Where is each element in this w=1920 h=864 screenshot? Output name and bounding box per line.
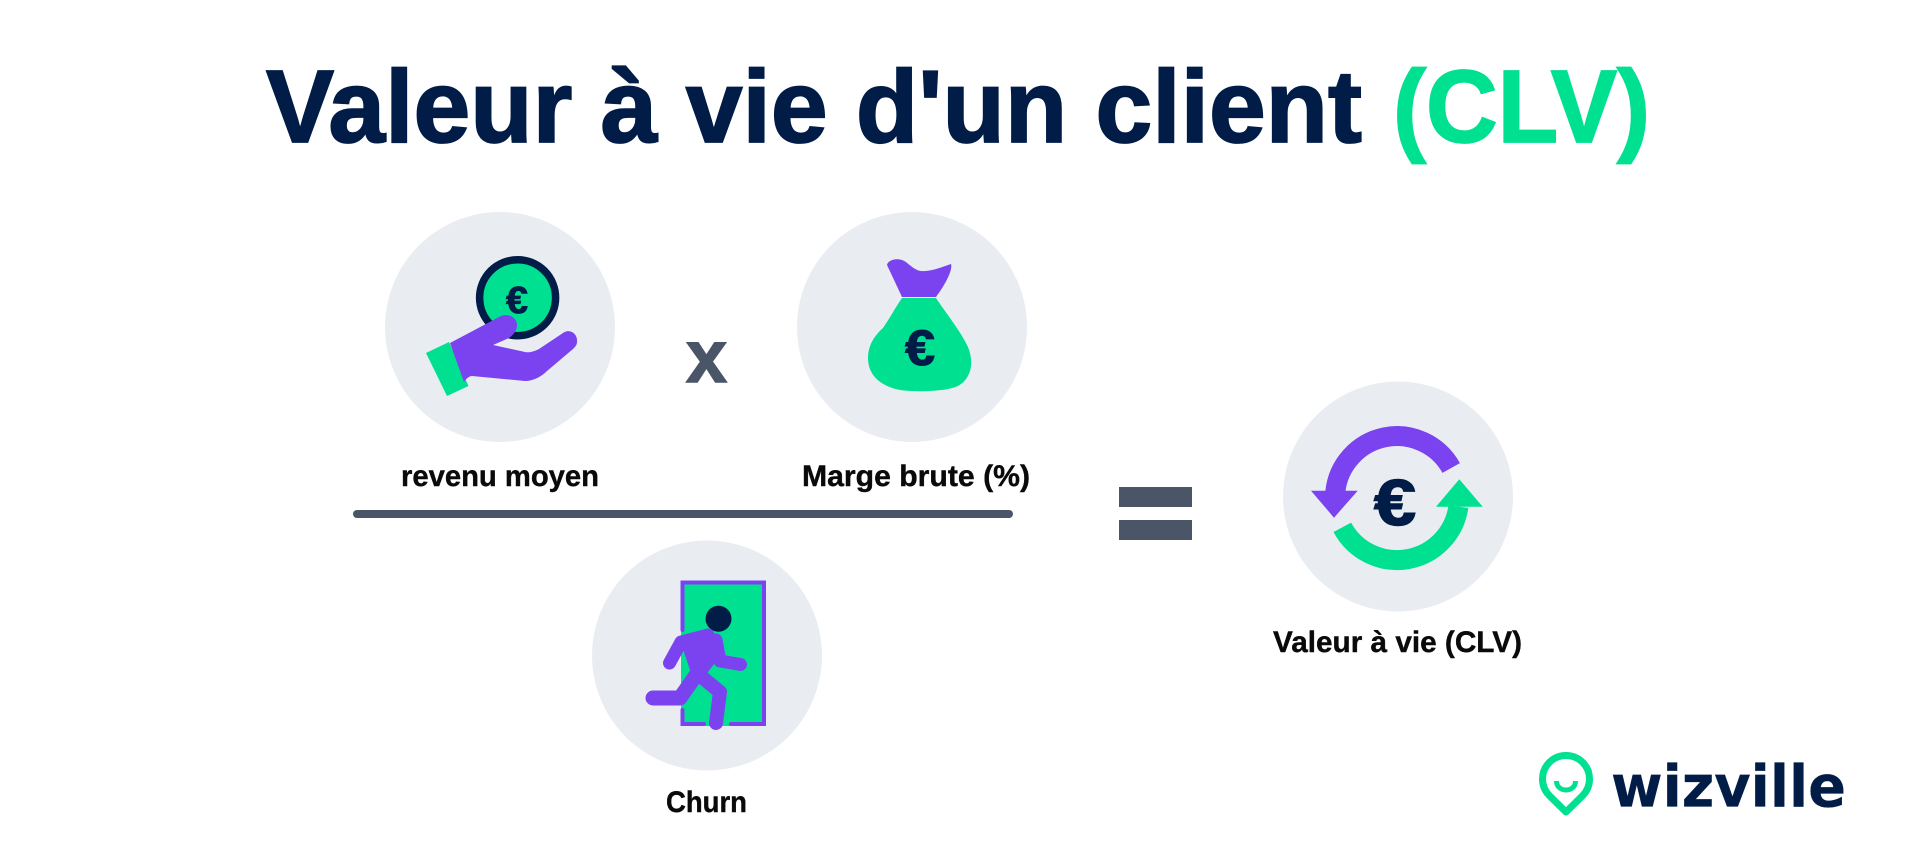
icon: euro with circular arrows <box>1311 436 1483 560</box>
panel: churn <box>592 540 822 770</box>
label: revenu moyen: revenu moyen <box>401 460 599 493</box>
icon: money bag <box>868 259 971 391</box>
icon: euro with circular arrows: € <box>1374 466 1416 539</box>
circle background: marge brute <box>797 212 1027 442</box>
label: marge brute: Marge brute (%) <box>802 460 1030 493</box>
title: Valeur à vie d'un client <box>266 49 1362 164</box>
multiply sign: x <box>686 315 727 398</box>
icon: money bag: € <box>905 320 935 376</box>
circle background: churn <box>592 540 822 770</box>
label: churn: Churn <box>666 786 747 819</box>
logo pin icon <box>1542 755 1589 812</box>
circle background: revenu moyen <box>385 212 615 442</box>
icon: person running out of door <box>653 581 766 726</box>
panel: marge brute <box>797 212 1027 442</box>
fraction bar <box>353 510 1013 518</box>
logo wordmark: wizville <box>1611 752 1846 820</box>
panel: valeur à vie <box>1283 382 1513 612</box>
logo: wizville <box>1542 752 1846 820</box>
circle background: valeur à vie <box>1283 382 1513 612</box>
panel: revenu moyen <box>385 212 615 442</box>
label: valeur à vie: Valeur à vie (CLV) <box>1273 626 1522 659</box>
equals sign <box>1119 487 1192 540</box>
icon: hand holding coin <box>426 260 577 396</box>
title: (CLV) <box>1393 49 1650 164</box>
icon: hand holding coin: € <box>506 280 528 322</box>
